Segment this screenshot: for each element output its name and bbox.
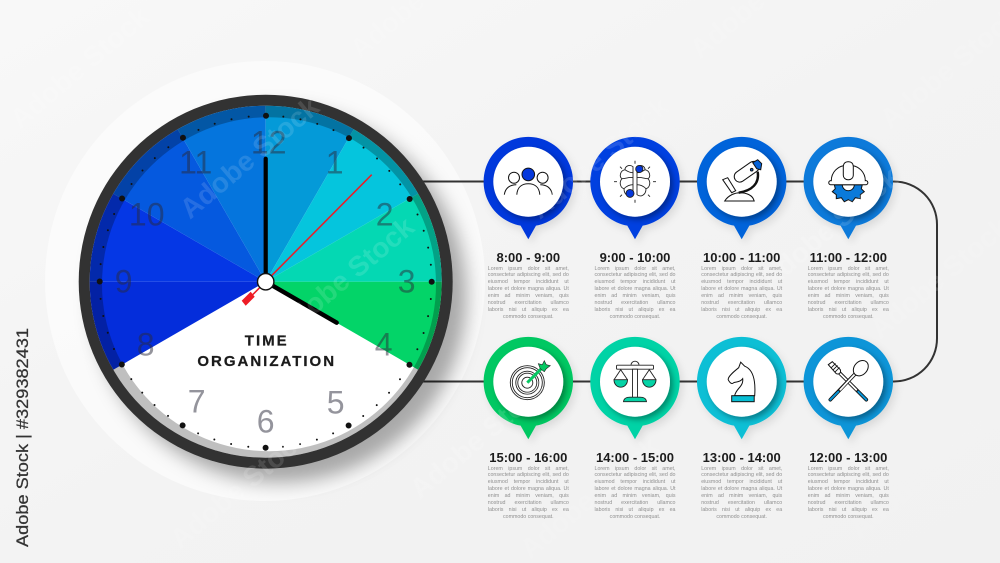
text block: 15:00 - 16:00: 15:00 - 16:00	[489, 450, 567, 465]
text block: 13:00 - 14:00: 13:00 - 14:00	[703, 450, 781, 465]
infographic artwork: clock, connector, pins: Adobe Stock	[4, 1, 155, 135]
text block: 10:00 - 11:00: labore et dolore magna aliqua. Ut	[701, 286, 782, 292]
pin: 14:00 - 15:00 scales	[590, 337, 680, 439]
clock coloured hour sectors	[90, 106, 442, 370]
infographic artwork: clock, connector, pins: Adobe Stock	[269, 211, 420, 345]
icon: microscope	[723, 159, 762, 201]
text block: 12:00 - 13:00: labore et dolore magna aliqua. Ut	[808, 486, 889, 492]
text block: 9:00 - 10:00: laboris nisi ut aliquip ex ea	[594, 307, 676, 313]
text block: 15:00 - 16:00	[488, 450, 569, 520]
clock numerals: 6	[257, 404, 275, 440]
text block: 13:00 - 14:00: eiusmod tempor incididunt ut	[701, 479, 782, 485]
clock numerals: 11	[179, 145, 212, 181]
text block: 8:00 - 9:00: commodo consequat.	[503, 314, 554, 320]
text block: 11:00 - 12:00: nostrud exercitation ullamco	[808, 300, 889, 306]
text block: 14:00 - 15:00: consectetur adipiscing elit, sed do	[594, 472, 676, 478]
clock numerals: 1	[326, 145, 344, 181]
text block: 14:00 - 15:00: enim ad minim veniam, quis	[594, 493, 676, 499]
text block: 10:00 - 11:00: commodo consequat.	[716, 314, 767, 320]
text block: 11:00 - 12:00: labore et dolore magna aliqua. Ut	[808, 286, 889, 292]
text block: 8:00 - 9:00: labore et dolore magna aliqua. Ut	[488, 286, 569, 292]
text block: 9:00 - 10:00	[594, 250, 676, 320]
text block: 13:00 - 14:00: nostrud exercitation ullamco	[701, 500, 782, 506]
clock numerals: 7	[188, 384, 206, 420]
infographic artwork: clock, connector, pins: Adobe Stock	[524, 91, 675, 225]
text block: 13:00 - 14:00: enim ad minim veniam, quis	[701, 493, 782, 499]
clock numerals: 12	[251, 125, 286, 161]
pin: 11:00 - 12:00 helmet and gear	[804, 137, 893, 239]
text block: 10:00 - 11:00	[701, 250, 782, 320]
text block: 8:00 - 9:00: enim ad minim veniam, quis	[488, 293, 569, 299]
icon: target	[510, 361, 550, 400]
infographic artwork: clock, connector, pins: Adobe Stock	[514, 431, 665, 563]
text block: 13:00 - 14:00: labore et dolore magna aliqua. Ut	[701, 486, 782, 492]
text block: 9:00 - 10:00: Lorem ipsum dolor sit amet,	[594, 266, 676, 272]
text block: 9:00 - 10:00: 9:00 - 10:00	[600, 250, 670, 265]
text block: 14:00 - 15:00: eiusmod tempor incididunt ut	[594, 479, 676, 485]
clock minute dots	[100, 116, 432, 448]
pin: 10:00 - 11:00 microscope	[697, 137, 786, 239]
text block: 8:00 - 9:00: nostrud exercitation ullamco	[488, 300, 569, 306]
text block: 14:00 - 15:00: 14:00 - 15:00	[596, 450, 674, 465]
text block: 13:00 - 14:00: consectetur adipiscing elit, sed do	[701, 472, 782, 478]
text block: 12:00 - 13:00: commodo consequat.	[823, 514, 874, 520]
text block: 12:00 - 13:00: enim ad minim veniam, quis	[808, 493, 889, 499]
clock numerals	[115, 125, 416, 440]
clock numerals: 2	[376, 197, 394, 233]
clock numerals: 9	[115, 264, 133, 300]
text block: 9:00 - 10:00: nostrud exercitation ullamco	[594, 300, 676, 306]
text block: 14:00 - 15:00: commodo consequat.	[610, 514, 660, 520]
text block: 8:00 - 9:00: consectetur adipiscing elit, sed do	[488, 272, 569, 278]
text block: 13:00 - 14:00: Lorem ipsum dolor sit amet,	[701, 466, 782, 472]
text block: 9:00 - 10:00: eiusmod tempor incididunt ut	[594, 279, 676, 285]
text block: 11:00 - 12:00: Lorem ipsum dolor sit amet,	[808, 266, 889, 272]
text block: 15:00 - 16:00: commodo consequat.	[503, 514, 554, 520]
clock numerals: 5	[327, 385, 345, 421]
text block: 15:00 - 16:00: enim ad minim veniam, quis	[488, 493, 569, 499]
clock title: TIME	[245, 333, 289, 350]
text block: 14:00 - 15:00	[594, 450, 676, 520]
icon: brain	[614, 161, 656, 203]
text block: 14:00 - 15:00: laboris nisi ut aliquip ex ea	[594, 507, 676, 513]
text block: 10:00 - 11:00: eiusmod tempor incididunt ut	[701, 279, 782, 285]
text block: 15:00 - 16:00: labore et dolore magna aliqua. Ut	[488, 486, 569, 492]
text block: 12:00 - 13:00: Lorem ipsum dolor sit amet,	[808, 466, 889, 472]
clock centre pin	[258, 274, 274, 290]
text block: 10:00 - 11:00: Lorem ipsum dolor sit amet,	[701, 266, 782, 272]
clock title: ORGANIZATION	[197, 353, 336, 370]
text block: 10:00 - 11:00: 10:00 - 11:00	[703, 250, 780, 265]
text block: 10:00 - 11:00: enim ad minim veniam, quis	[701, 293, 782, 299]
text block: 11:00 - 12:00: commodo consequat.	[823, 314, 874, 320]
clock numerals: 4	[375, 327, 393, 363]
text block: 11:00 - 12:00: laboris nisi ut aliquip ex ea	[808, 307, 889, 313]
text block: 14:00 - 15:00: Lorem ipsum dolor sit amet,	[594, 466, 676, 472]
text block: 14:00 - 15:00: labore et dolore magna aliqua. Ut	[594, 486, 676, 492]
clock title	[197, 333, 336, 370]
text block: 9:00 - 10:00: commodo consequat.	[610, 314, 660, 320]
infographic artwork: clock, connector, pins: Adobe Stock	[174, 91, 325, 225]
pin: 13:00 - 14:00 knight	[697, 337, 786, 439]
text block: 8:00 - 9:00: laboris nisi ut aliquip ex ea	[488, 307, 569, 313]
text block: 12:00 - 13:00	[808, 450, 889, 520]
minute hand	[264, 159, 268, 282]
text block: 12:00 - 13:00: eiusmod tempor incididunt ut	[808, 479, 889, 485]
hour hand	[266, 282, 337, 323]
text block: 14:00 - 15:00: nostrud exercitation ullamco	[594, 500, 676, 506]
pin: 9:00 - 10:00 brain	[590, 137, 680, 239]
icon: fork and spoon	[828, 358, 871, 400]
text block: 8:00 - 9:00	[488, 250, 569, 320]
text block: 9:00 - 10:00: enim ad minim veniam, quis	[594, 293, 676, 299]
text block: 13:00 - 14:00	[701, 450, 782, 520]
infographic artwork: clock, connector, pins: Adobe Stock	[754, 161, 905, 295]
text block: 10:00 - 11:00: nostrud exercitation ullamco	[701, 300, 782, 306]
text block: 12:00 - 13:00: consectetur adipiscing elit, sed do	[808, 472, 889, 478]
text block: 10:00 - 11:00: consectetur adipiscing elit, sed do	[701, 272, 782, 278]
infographic artwork: clock, connector, pins: Adobe Stock	[404, 371, 555, 505]
pin: 12:00 - 13:00 fork and spoon	[804, 337, 893, 439]
connector line	[420, 182, 937, 382]
text block: 15:00 - 16:00: nostrud exercitation ullamco	[488, 500, 569, 506]
text block: 12:00 - 13:00: laboris nisi ut aliquip ex ea	[808, 507, 889, 513]
clock numerals: 8	[137, 327, 155, 363]
clock	[66, 82, 466, 469]
icon: helmet and gear	[829, 162, 868, 202]
text block: 11:00 - 12:00: 11:00 - 12:00	[810, 250, 887, 265]
text block: 12:00 - 13:00: 12:00 - 13:00	[809, 450, 887, 465]
text block: 8:00 - 9:00: Lorem ipsum dolor sit amet,	[488, 266, 569, 272]
icon: people	[504, 168, 552, 195]
pin: 15:00 - 16:00 target	[484, 337, 573, 439]
text block: 15:00 - 16:00: laboris nisi ut aliquip ex ea	[488, 507, 569, 513]
text block: 11:00 - 12:00	[808, 250, 889, 320]
pin: 8:00 - 9:00 people	[484, 137, 573, 239]
text block: 15:00 - 16:00: consectetur adipiscing elit, sed do	[488, 472, 569, 478]
infographic artwork: clock, connector, pins: Adobe Stock	[844, 411, 995, 545]
text block: 13:00 - 14:00: commodo consequat.	[716, 514, 767, 520]
clock numerals: 3	[398, 264, 416, 300]
text block: 11:00 - 12:00: consectetur adipiscing elit, sed do	[808, 272, 889, 278]
text block: 11:00 - 12:00: enim ad minim veniam, quis	[808, 293, 889, 299]
second hand	[242, 175, 372, 306]
text block: 8:00 - 9:00: eiusmod tempor incididunt ut	[488, 279, 569, 285]
text block: 8:00 - 9:00: 8:00 - 9:00	[496, 250, 560, 265]
icon: scales	[614, 361, 656, 402]
text block: 15:00 - 16:00: eiusmod tempor incididunt ut	[488, 479, 569, 485]
text block: 15:00 - 16:00: Lorem ipsum dolor sit amet,	[488, 466, 569, 472]
text block: 9:00 - 10:00: labore et dolore magna aliqua. Ut	[594, 286, 676, 292]
text block: 9:00 - 10:00: consectetur adipiscing elit, sed do	[594, 272, 676, 278]
text block: 10:00 - 11:00: laboris nisi ut aliquip ex ea	[701, 307, 782, 313]
text block: 13:00 - 14:00: laboris nisi ut aliquip ex ea	[701, 507, 782, 513]
stock id label: Adobe Stock | #329382431	[13, 328, 32, 547]
clock numerals: 10	[129, 197, 164, 233]
infographic artwork: clock, connector, pins: Adobe Stock	[164, 421, 315, 555]
text block: 12:00 - 13:00: nostrud exercitation ullamco	[808, 500, 889, 506]
text block: 11:00 - 12:00: eiusmod tempor incididunt ut	[808, 279, 889, 285]
clock hour dots	[100, 116, 432, 448]
icon: chess knight	[728, 362, 755, 402]
